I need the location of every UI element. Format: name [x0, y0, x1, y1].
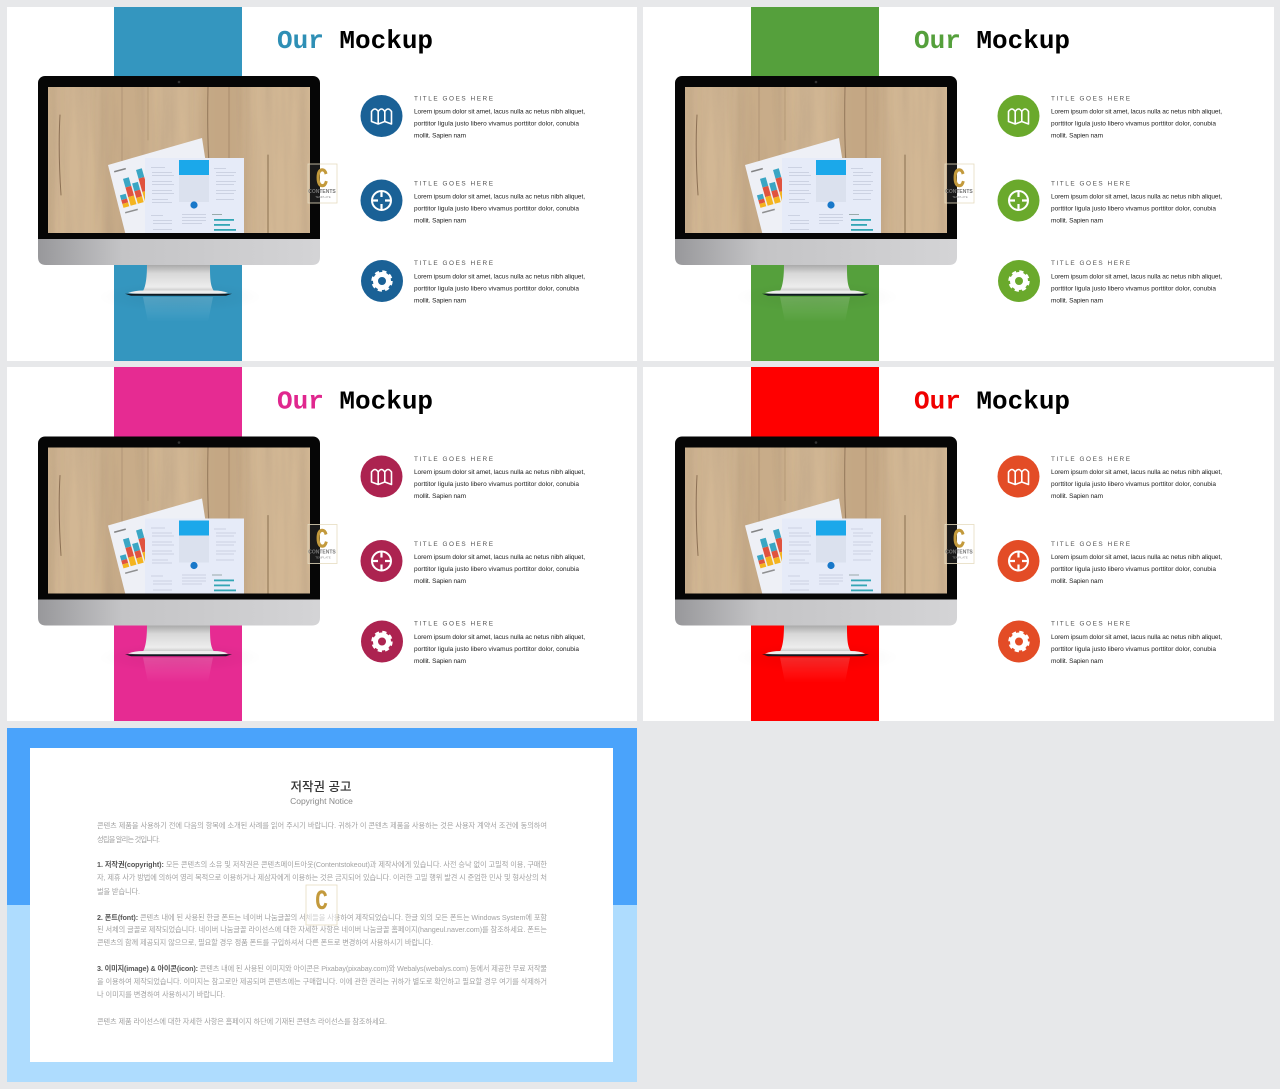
item 2: Lorem ipsum dolor sit amet, lacus nulla ac netus nibh aliquet,	[414, 554, 585, 561]
item 1: Lorem ipsum dolor sit amet, lacus nulla ac netus nibh aliquet,	[414, 469, 585, 476]
item 3: porttitor ligula justo libero vivamus porttitor dolor, conubia	[414, 646, 579, 653]
item 1: TITLE GOES HERE	[414, 456, 493, 463]
copyright body text: 된 서체의 글꼴로 제작되었습니다. 네이버 나눔글꼴 라이선스에 대한 자세한 사항은 네이버 나눔글꼴 홈페이지(hangeul.naver.com)를 참조하세요. 폰트는	[97, 925, 547, 934]
vertical stripe	[751, 367, 879, 721]
watermark	[306, 885, 337, 925]
watermark: CONTENTS	[945, 550, 973, 556]
item 1: mollit. Sapien nam	[1051, 132, 1103, 140]
item 2: mollit. Sapien nam	[1051, 218, 1103, 224]
panel: pink mockup	[7, 367, 637, 721]
item 1: Lorem ipsum dolor sit amet, lacus nulla ac netus nibh aliquet,	[1051, 469, 1222, 476]
watermark: C	[953, 525, 965, 557]
copyright body text: 2. 폰트(font): 콘텐츠 내에 된 사용된 한글 폰트는 네이버 나눔글꼴의 서체들을 사용하여 제작되었습니다. 한글 외의 모든 폰트는 Windows System에 포함	[97, 913, 547, 922]
item 2: Lorem ipsum dolor sit amet, lacus nulla ac netus nibh aliquet,	[1051, 194, 1222, 200]
heading: Our Mockup	[914, 386, 1070, 416]
item 2: porttitor ligula justo libero vivamus porttitor dolor, conubia	[414, 206, 579, 212]
watermark	[945, 164, 974, 203]
item 3: mollit. Sapien nam	[414, 658, 466, 665]
item 3: Lorem ipsum dolor sit amet, lacus nulla ac netus nibh aliquet,	[414, 274, 585, 280]
copyright body text: 콘텐츠의 함께 제공되지 않으므로, 필요할 경우 정품 폰트를 구입하셔서 다른 폰트로 변경하여 사용하시기 바랍니다.	[97, 938, 433, 947]
item 2: porttitor ligula justo libero vivamus porttitor dolor, conubia	[414, 566, 579, 573]
monitor mockup	[675, 420, 957, 682]
item 1: mollit. Sapien nam	[414, 132, 466, 140]
watermark: TEMPLATE	[315, 195, 331, 199]
copyright body text: 을 이용하여 제작되었습니다. 이미지는 참고로만 제공되며 콘텐츠에는 구매합니다. 이에 관한 권리는 귀하가 별도로 확인하고 필요할 경우 여기를 삭제하거	[97, 977, 547, 986]
item 1: porttitor ligula justo libero vivamus porttitor dolor, conubia	[414, 120, 579, 128]
item 1: mollit. Sapien nam	[1051, 493, 1103, 500]
item 2: mollit. Sapien nam	[414, 218, 466, 224]
panel: red mockup	[643, 367, 1274, 721]
panel: copyright notice	[7, 728, 637, 1082]
monitor mockup	[38, 60, 320, 322]
watermark: TEMPLATE	[952, 556, 968, 560]
item 3: mollit. Sapien nam	[1051, 658, 1103, 665]
copyright body text: 나 이미지를 변경하여 사용하시기 바랍니다.	[97, 990, 225, 999]
item 1	[360, 456, 585, 500]
item 2	[360, 180, 585, 224]
item 3	[998, 620, 1222, 665]
monitor mockup	[38, 420, 320, 682]
item 1: porttitor ligula justo libero vivamus porttitor dolor, conubia	[1051, 120, 1216, 128]
copyright body text: 콘텐츠 제품을 사용하기 전에 다음의 항목에 소개된 사례를 읽어 주시기 바랍니다. 귀하가 이 콘텐츠 제품을 사용하는 것은 사용자 계약서 조건에 동의하여	[97, 821, 547, 830]
watermark: C	[315, 886, 328, 918]
item 2: TITLE GOES HERE	[1051, 180, 1130, 188]
item 3: TITLE GOES HERE	[414, 620, 493, 628]
item 3: TITLE GOES HERE	[1051, 620, 1130, 628]
heading: Our Mockup	[277, 26, 433, 56]
item 2: TITLE GOES HERE	[414, 541, 493, 548]
heading: Our Mockup	[277, 386, 433, 416]
item 1: Lorem ipsum dolor sit amet, lacus nulla ac netus nibh aliquet,	[414, 108, 585, 116]
item 2	[998, 180, 1222, 224]
copyright body text: 벌을 받습니다.	[97, 887, 140, 896]
watermark	[308, 164, 337, 203]
item 2	[360, 540, 585, 585]
item 1: TITLE GOES HERE	[414, 96, 493, 102]
item 2: mollit. Sapien nam	[1051, 578, 1103, 585]
item 3: TITLE GOES HERE	[1051, 260, 1130, 267]
item 1	[998, 456, 1222, 500]
item 2: porttitor ligula justo libero vivamus porttitor dolor, conubia	[1051, 566, 1216, 573]
watermark: TEMPLATE	[952, 195, 968, 199]
item 2: Lorem ipsum dolor sit amet, lacus nulla ac netus nibh aliquet,	[1051, 554, 1222, 561]
item 1: mollit. Sapien nam	[414, 493, 466, 500]
item 2: mollit. Sapien nam	[414, 578, 466, 585]
item 1: Lorem ipsum dolor sit amet, lacus nulla ac netus nibh aliquet,	[1051, 108, 1222, 116]
item 3: porttitor ligula justo libero vivamus porttitor dolor, conubia	[414, 286, 579, 292]
item 1: porttitor ligula justo libero vivamus porttitor dolor, conubia	[414, 481, 579, 488]
monitor mockup	[675, 60, 957, 322]
watermark: CONTENTS	[308, 550, 336, 556]
item 2: TITLE GOES HERE	[414, 180, 493, 188]
item 2	[998, 540, 1222, 585]
vertical stripe	[751, 7, 879, 361]
item 3: TITLE GOES HERE	[414, 260, 493, 267]
vertical stripe	[114, 367, 242, 721]
watermark	[945, 524, 974, 564]
copyright body text	[97, 821, 547, 1026]
copyright body text: 자, 제휴 사가 방법에 의하여 영리 목적으로 이용하거나 제삼자에게 이용하는 것은 금지되어 있습니다. 이러한 고밀 행위 발견 시 준엄한 민사 및 형사상의 처	[97, 873, 547, 882]
copyright body text: 콘텐츠 제품 라이선스에 대한 자세한 사항은 홈페이지 하단에 기재된 콘텐츠 라이선스를 참조하세요.	[97, 1017, 387, 1026]
item 3: mollit. Sapien nam	[414, 298, 466, 304]
item 2: porttitor ligula justo libero vivamus porttitor dolor, conubia	[1051, 206, 1216, 212]
item 3: Lorem ipsum dolor sit amet, lacus nulla ac netus nibh aliquet,	[1051, 274, 1222, 280]
item 3	[998, 260, 1222, 304]
watermark: C	[316, 525, 328, 557]
item 3: porttitor ligula justo libero vivamus porttitor dolor, conubia	[1051, 646, 1216, 653]
copyright subtitle: Copyright Notice	[290, 796, 353, 806]
item 2: TITLE GOES HERE	[1051, 541, 1130, 548]
item 1	[360, 95, 585, 140]
watermark: C	[953, 164, 965, 196]
item 3: Lorem ipsum dolor sit amet, lacus nulla ac netus nibh aliquet,	[1051, 634, 1222, 641]
item 3: porttitor ligula justo libero vivamus porttitor dolor, conubia	[1051, 286, 1216, 292]
watermark: TEMPLATE	[315, 556, 331, 560]
watermark: C	[316, 164, 328, 196]
copyright body text: 성립을 알리는 것입니다.	[97, 835, 160, 844]
heading: Our Mockup	[914, 26, 1070, 56]
watermark: CONTENTS	[945, 189, 973, 195]
copyright title: 저작권 공고	[291, 780, 351, 794]
item 1: TITLE GOES HERE	[1051, 456, 1130, 463]
item 1: TITLE GOES HERE	[1051, 96, 1130, 102]
vertical stripe	[114, 7, 242, 361]
item 3: Lorem ipsum dolor sit amet, lacus nulla ac netus nibh aliquet,	[414, 634, 585, 641]
item 3: mollit. Sapien nam	[1051, 298, 1103, 304]
item 1: porttitor ligula justo libero vivamus porttitor dolor, conubia	[1051, 481, 1216, 488]
item 3	[361, 620, 585, 665]
item 3	[361, 260, 585, 304]
watermark: CONTENTS	[308, 189, 336, 195]
item 2: Lorem ipsum dolor sit amet, lacus nulla ac netus nibh aliquet,	[414, 194, 585, 200]
watermark	[308, 524, 337, 564]
item 1	[998, 95, 1222, 140]
panel: green mockup	[643, 7, 1274, 361]
copyright body text: 1. 저작권(copyright): 모든 콘텐츠의 소유 및 저작권은 콘텐츠메이트아웃(Contentstokeout)과 제작사에게 있습니다. 사전 승낙 없이 고밀적 이용, 구매한	[97, 860, 547, 869]
copyright body text: 3. 이미지(image) & 아이콘(icon): 콘텐츠 내에 된 사용된 이미지와 아이콘은 Pixabay(pixabay.com)와 Webalys(webalys.com) 등에서 제공한 무료 저작물	[97, 964, 547, 973]
panel: blue mockup	[7, 7, 637, 361]
